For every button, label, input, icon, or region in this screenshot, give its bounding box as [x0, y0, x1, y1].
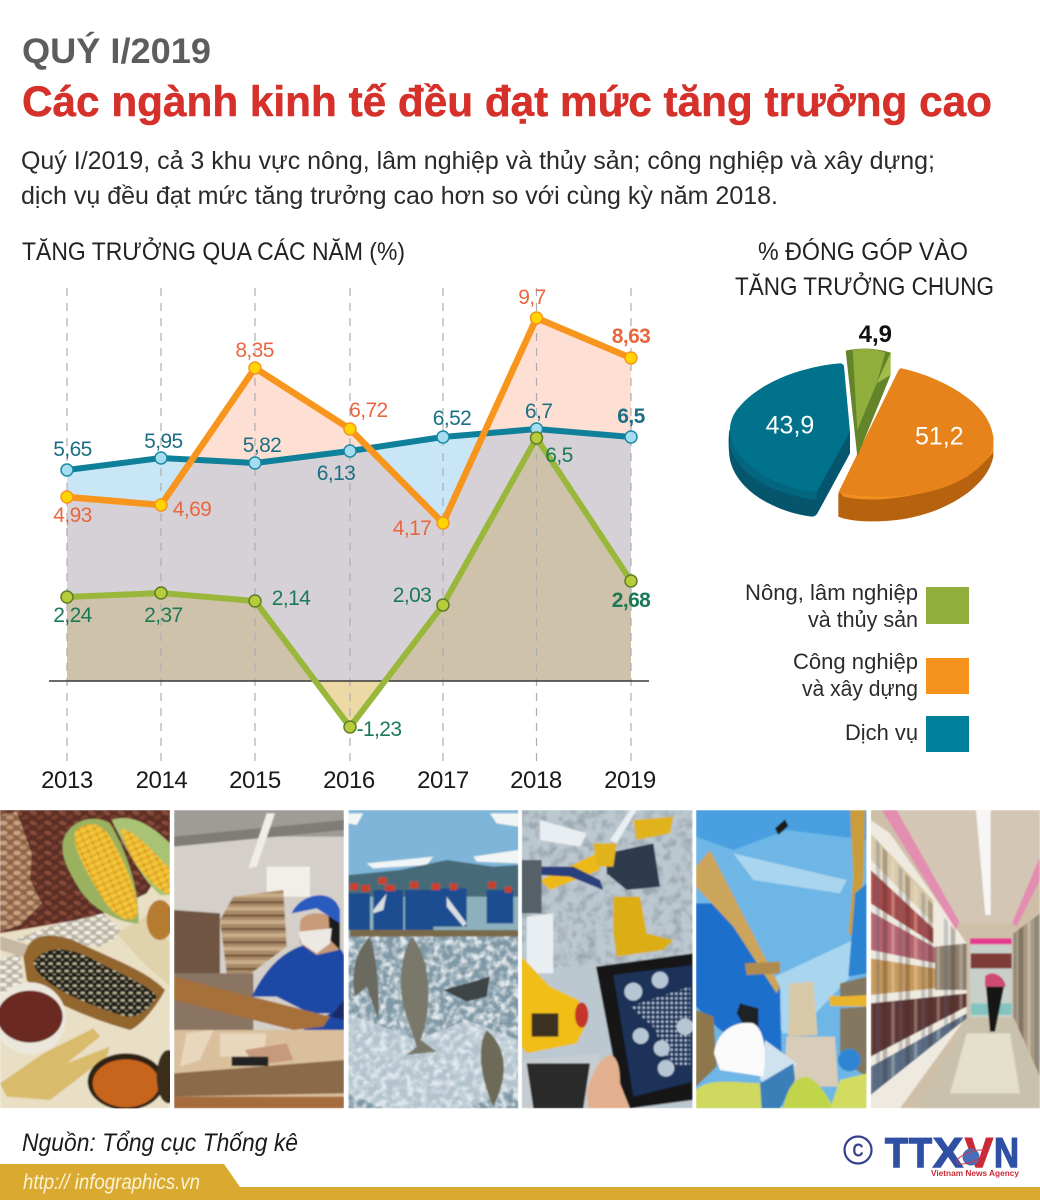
data labels: services: 5,95 — [144, 430, 183, 453]
photo: supermarket aisle — [871, 810, 1040, 1108]
legend: agriculture: Nông, lâm nghiệp — [745, 580, 918, 605]
year axis labels: 2019 — [604, 767, 656, 794]
value: 51,2: 51,2 — [915, 424, 964, 451]
data labels: services: 6,52 — [433, 407, 471, 430]
photo strip — [0, 810, 1040, 1110]
markers: agriculture — [61, 432, 637, 733]
logo: TTXVN — [844, 1129, 1020, 1178]
data labels: services: 5,65 — [53, 438, 92, 461]
photo: robot and tablet — [522, 810, 693, 1108]
year axis labels: 2014 — [136, 767, 187, 794]
year axis labels: 2015 — [229, 767, 281, 794]
source note: Nguồn: Tổng cục Thống kê — [22, 1129, 298, 1157]
data labels: agriculture: 2,14 — [272, 587, 311, 610]
area: agriculture — [67, 438, 631, 681]
data labels: agriculture: 2,37 — [144, 604, 183, 627]
legend: industry: và xây dựng — [802, 676, 918, 701]
photo: fish harvest — [348, 810, 518, 1108]
year axis labels: 2018 — [510, 767, 562, 794]
value: 43,9: 43,9 — [766, 412, 814, 439]
data labels: agriculture — [53, 444, 651, 741]
heading: quarter label: QUÝ I/2019 — [22, 31, 211, 71]
intro text — [21, 147, 935, 210]
year axis labels: 2017 — [417, 767, 469, 794]
photo: wood factory worker — [174, 810, 344, 1108]
data labels: industry: 8,35 — [235, 339, 274, 362]
line: agriculture — [67, 438, 631, 727]
data labels: services: 6,7 — [525, 400, 552, 423]
data labels: agriculture: 2,24 — [53, 604, 93, 627]
globe emblem — [955, 1147, 987, 1167]
wordmark letters — [885, 1129, 1019, 1176]
markers: services — [61, 423, 637, 476]
wordmark letters: T — [909, 1129, 932, 1176]
legend: services — [845, 716, 969, 752]
pie chart heading: % ĐÓNG GÓP VÀO — [758, 237, 968, 266]
markers: industry — [61, 312, 637, 529]
wordmark letters: V — [965, 1129, 993, 1176]
line chart: growth by year — [41, 286, 656, 794]
data labels: agriculture: 6,5 — [545, 444, 573, 467]
slice: industry — [838, 368, 993, 521]
data labels: services: 5,82 — [243, 434, 281, 457]
wordmark letters: X — [933, 1129, 963, 1176]
legend: industry: Công nghiệp — [793, 649, 918, 674]
wordmark letters: N — [994, 1129, 1019, 1176]
wordmark letters: T — [885, 1129, 908, 1176]
agency name: Vietnam News Agency — [931, 1169, 1020, 1178]
data labels: agriculture: 2,68 — [612, 589, 651, 612]
data labels: services — [53, 400, 646, 485]
slice: services — [729, 363, 850, 517]
line chart heading: TĂNG TRƯỞNG QUA CÁC NĂM (%) — [22, 236, 405, 266]
area: negative growth — [315, 681, 385, 727]
area: industry above services — [192, 368, 368, 463]
line: industry — [67, 318, 631, 523]
data labels: industry: 8,63 — [612, 325, 650, 348]
legend: services: Dịch vụ — [845, 720, 918, 745]
data labels: industry: 4,69 — [173, 498, 211, 521]
value: 4,9: 4,9 — [859, 321, 892, 348]
area: shared grey — [67, 429, 631, 681]
slice: agriculture — [846, 349, 891, 457]
year axis labels: 2013 — [41, 767, 93, 794]
data labels: industry — [53, 286, 650, 540]
data labels: agriculture: 2,03 — [393, 584, 431, 607]
intro text: Quý I/2019, cả 3 khu vực nông, lâm nghiệp và thủy sản; công nghiệp và xây dựng; — [21, 147, 935, 175]
line: services — [67, 429, 631, 470]
legend: agriculture — [745, 580, 969, 632]
website url: http:// infographics.vn — [23, 1171, 200, 1194]
icon: copyright — [844, 1136, 872, 1164]
data labels: industry: 4,93 — [53, 504, 92, 527]
pie chart heading — [735, 237, 994, 301]
photo: construction site — [696, 810, 867, 1108]
photo: grains and corn — [0, 810, 180, 1110]
pie chart: contribution — [729, 321, 993, 521]
legend: agriculture: và thủy sản — [808, 607, 918, 632]
legend — [745, 580, 969, 752]
year axis labels — [41, 767, 656, 794]
data labels: services: 6,5 — [617, 405, 646, 428]
icon: copyright: C — [852, 1140, 864, 1160]
data labels: industry: 4,17 — [393, 517, 431, 540]
area: services above industry — [67, 458, 192, 505]
data labels: industry: 9,7 — [518, 286, 546, 309]
year axis labels: 2016 — [323, 767, 375, 794]
title: Các ngành kinh tế đều đạt mức tăng trưởng cao — [22, 78, 992, 126]
data labels: services: 6,13 — [317, 462, 355, 485]
pie chart heading: TĂNG TRƯỞNG CHUNG — [735, 271, 994, 301]
data labels: industry: 6,72 — [349, 399, 388, 422]
intro text: dịch vụ đều đạt mức tăng trưởng cao hơn so với cùng kỳ năm 2018. — [21, 182, 778, 210]
footer bar — [0, 1164, 1040, 1200]
data labels: agriculture: -1,23 — [357, 718, 401, 741]
legend: industry — [793, 649, 969, 701]
